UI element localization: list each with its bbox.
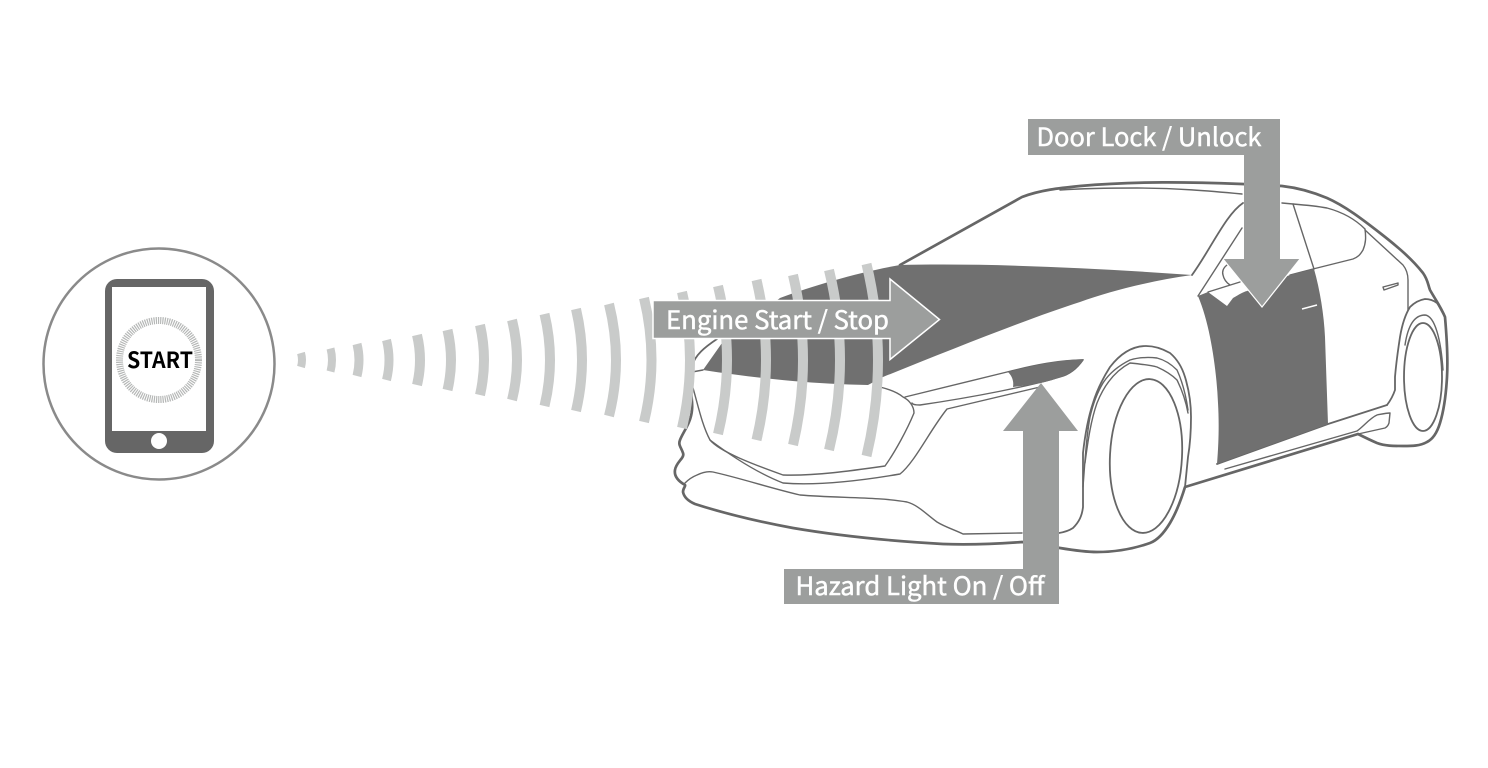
label: door lock / unlock: Door Lock / Unlock bbox=[1036, 118, 1262, 154]
car: grille outline bbox=[693, 387, 914, 475]
start button ring bbox=[120, 320, 198, 400]
car: headlight bbox=[905, 360, 1083, 405]
arrow: hazard light on / off bbox=[784, 383, 1078, 604]
phone home button bbox=[151, 433, 167, 449]
car: roof inner line bbox=[1060, 188, 1242, 194]
car: headlight highlight bbox=[1008, 359, 1084, 387]
car: front lip outline bbox=[692, 339, 717, 366]
car: front wheel bbox=[1106, 377, 1186, 535]
car illustration bbox=[675, 182, 1447, 552]
label: engine start / stop: Engine Start / Stop bbox=[666, 301, 889, 337]
car: windshield edge bbox=[1192, 203, 1243, 275]
car: hood highlight bbox=[703, 265, 1192, 385]
car: rear wheel bbox=[1404, 323, 1442, 431]
icon: phone body bbox=[105, 279, 214, 453]
car: side sill bbox=[1217, 405, 1387, 464]
car: rear wheel arch bbox=[1387, 299, 1445, 405]
car: side window bbox=[1282, 203, 1366, 275]
car: outer body outline bbox=[675, 182, 1447, 552]
car: hood lip bbox=[692, 370, 703, 380]
car: door handle bbox=[1302, 305, 1317, 309]
car: front wheel arch bbox=[685, 472, 1022, 534]
car: lower grille line bbox=[710, 387, 1040, 484]
car: door highlight bbox=[1198, 269, 1328, 464]
phone screen bbox=[112, 287, 206, 431]
label: hazard light on / off: Hazard Light On / Off bbox=[796, 567, 1045, 603]
icon: smartphone in circle bbox=[44, 248, 274, 480]
arrow: engine start / stop bbox=[653, 279, 940, 360]
car: rear door handle bbox=[1383, 283, 1398, 290]
start button label: START bbox=[127, 343, 193, 375]
car: mirror bbox=[1208, 265, 1240, 292]
arrow: door lock / unlock bbox=[1028, 118, 1300, 307]
car: rear quarter bbox=[1365, 230, 1408, 310]
signal waves bbox=[301, 264, 878, 456]
